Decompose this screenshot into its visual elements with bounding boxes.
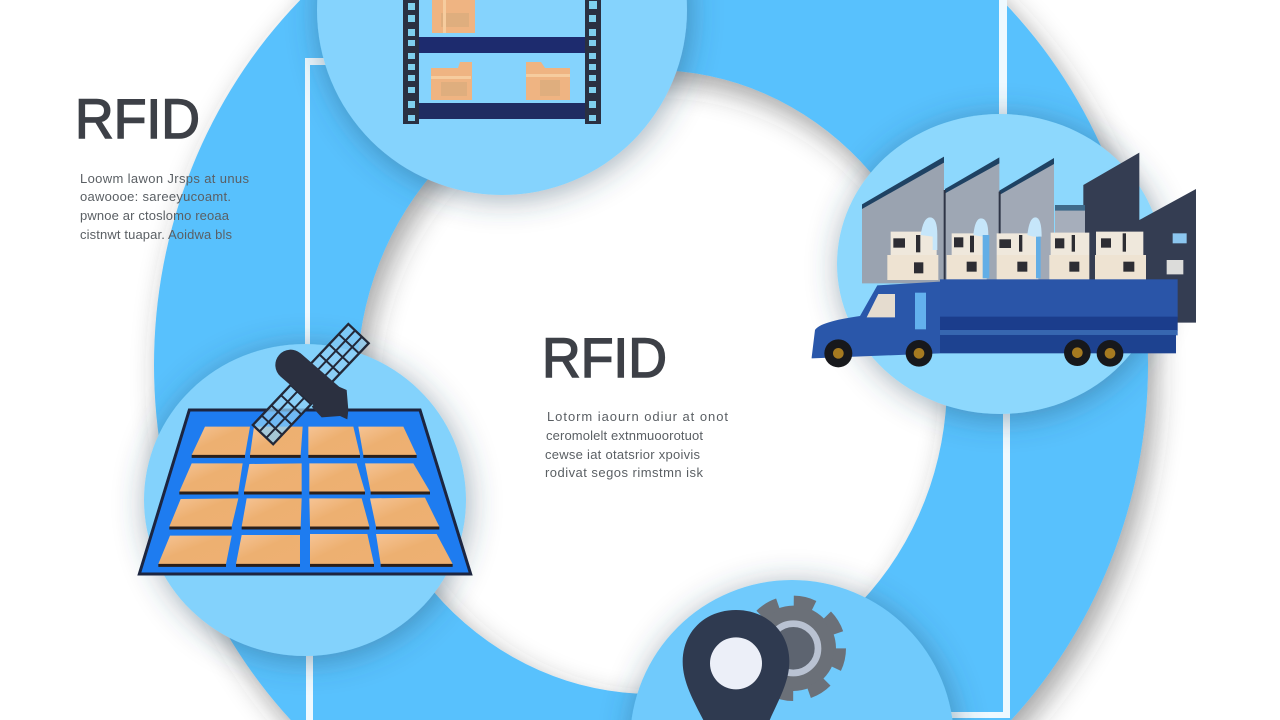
illustration: pin and gear bbox=[683, 602, 840, 720]
icon: cardboard boxes bbox=[431, 0, 570, 100]
panel: RFID tag and satellite node bbox=[139, 324, 471, 656]
text block: centre description: cewse iat otatsrior xpoivis bbox=[545, 447, 700, 462]
text block: left description: cistnwt tuapar. Aoidwa bls bbox=[80, 227, 232, 242]
node circle: top bbox=[317, 0, 687, 195]
icon: gear bbox=[747, 602, 840, 695]
panel: location and settings node bbox=[630, 580, 954, 720]
connector lines: white frame strokes bbox=[305, 0, 1010, 720]
text block: centre description: Lotorm iaourn odiur at onot bbox=[547, 409, 728, 424]
text block: left description: oawoooe: sareeyucoamt. bbox=[80, 189, 231, 204]
text block: centre description: ceromolelt extnmuoorotuot bbox=[546, 428, 703, 443]
ring: blue circular band bbox=[154, 0, 1148, 720]
heading: centre RFID: RFID bbox=[542, 326, 667, 389]
icon: tile panel bbox=[139, 410, 471, 574]
icon: factory buildings bbox=[862, 153, 1196, 323]
icon: shelving rack bbox=[403, 0, 601, 124]
illustration: solar panel and satellite bbox=[139, 324, 471, 574]
text block: left description: pwnoe ar ctoslomo reoaa bbox=[80, 208, 230, 223]
icon: delivery truck bbox=[812, 279, 1178, 367]
text block: centre description: rodivat segos rimstmn isk bbox=[545, 465, 704, 480]
text block: centre description bbox=[545, 409, 728, 480]
heading: left RFID: RFID bbox=[75, 87, 200, 150]
text block: left description: Loowm lawon Jrsps at unus bbox=[80, 171, 250, 186]
icon: satellite bbox=[253, 324, 369, 444]
illustration: factory and truck bbox=[812, 153, 1196, 367]
icon: location pin bbox=[683, 610, 789, 720]
panel: warehouse shelf node bbox=[317, 0, 687, 195]
panel: factory and truck node bbox=[812, 114, 1196, 414]
icon: stacked boxes bbox=[887, 217, 1146, 280]
text block: left description bbox=[80, 171, 250, 242]
node circle: left bbox=[144, 344, 466, 656]
node circle: bottom bbox=[630, 580, 954, 720]
node circle: right bbox=[837, 114, 1163, 414]
